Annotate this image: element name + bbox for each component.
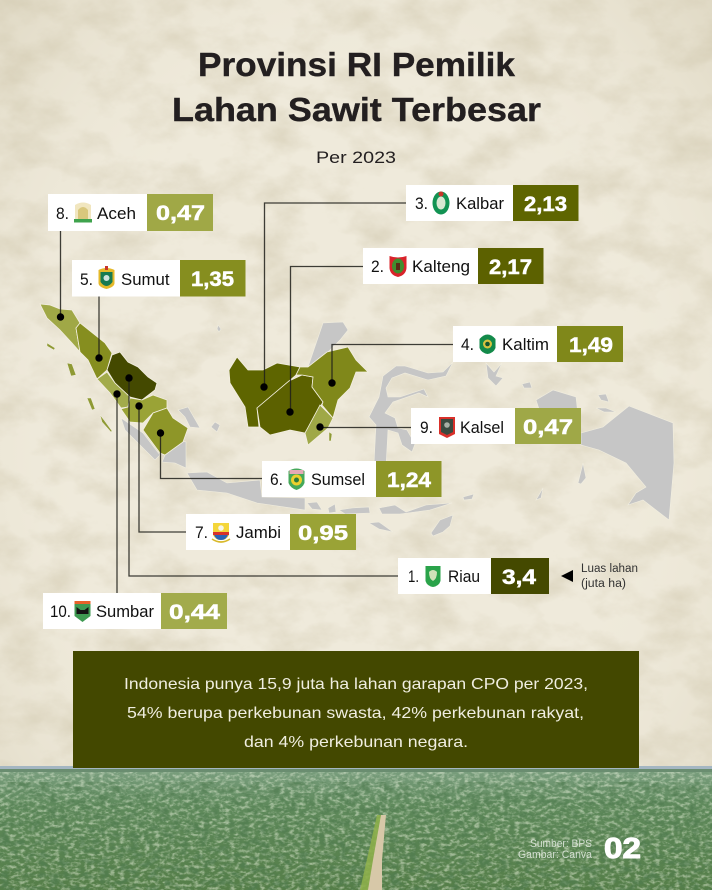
label: Jambi [186, 514, 356, 550]
emblem: Sumsel [288, 468, 304, 490]
legend note [561, 563, 638, 590]
label: Kaltim: 1,49 [569, 334, 613, 357]
label: Kalbar: 3. [415, 194, 428, 213]
label: Aceh: 8. [56, 204, 69, 223]
label: Sumbar [43, 593, 227, 629]
emblem: Jambi [212, 523, 230, 542]
callout box [73, 651, 639, 768]
source credit: Gambar: Canva [518, 849, 593, 861]
connector dots [57, 313, 336, 437]
label: Kalteng: 2. [371, 257, 384, 276]
label: Jambi: 0,95 [298, 522, 348, 545]
label: Sumsel: 1,24 [387, 469, 431, 492]
label: Aceh [48, 194, 213, 231]
label: Sumbar: 10. [50, 602, 71, 621]
label: Sumbar: Sumbar [96, 602, 154, 621]
label: Kalteng: 2,17 [489, 256, 532, 279]
label: Kalteng [363, 248, 544, 284]
emblem: Kalbar [432, 192, 450, 214]
small green islands [47, 343, 332, 441]
label: Kalsel: 9. [420, 418, 433, 437]
label: Sumut: 1,35 [191, 268, 234, 291]
connector lines [60, 203, 453, 593]
label: Riau [398, 558, 549, 594]
title: Lahan Sawit Terbesar [172, 91, 541, 128]
label: Jambi: 7. [195, 523, 208, 542]
gray islands [121, 322, 674, 536]
label: Riau: Riau [448, 567, 480, 586]
label: Kaltim: 4. [461, 335, 474, 354]
legend note: Luas lahan [581, 563, 638, 575]
subtitle: Per 2023 [316, 148, 396, 167]
province: Jambi [121, 395, 167, 423]
grass verge [360, 815, 384, 890]
label: Jambi: Jambi [236, 523, 281, 542]
label: Kalbar: 2,13 [524, 193, 567, 216]
label: Riau: 1. [408, 567, 419, 586]
emblem: Aceh [74, 202, 92, 222]
emblem: Kalteng [390, 256, 406, 277]
province: Kalteng [257, 375, 323, 435]
emblem: Sumut [98, 266, 114, 289]
label: Sumut: Sumut [121, 270, 170, 289]
dirt road [368, 815, 386, 890]
label: Kalbar [406, 185, 578, 221]
emblem: Sumbar [74, 601, 90, 622]
label: Kalsel: Kalsel [460, 418, 504, 437]
province: Sumbar [97, 372, 130, 408]
label: Kalsel [411, 408, 581, 444]
palm plantation photo [0, 766, 712, 890]
label: Sumut [72, 260, 246, 296]
province: Kalbar [229, 357, 300, 427]
callout box: dan 4% perkebunan negara. [244, 734, 468, 751]
label: Riau: 3,4 [502, 566, 536, 589]
title [172, 46, 541, 128]
callout box: 54% berupa perkebunan swasta, 42% perkebunan rakyat, [127, 705, 584, 722]
province: Sumut [76, 323, 112, 379]
icon: legend arrow [561, 570, 573, 582]
label: Kalteng: Kalteng [412, 257, 470, 276]
source credit: Sumber: BPS [530, 838, 592, 850]
map of Indonesia [40, 304, 674, 536]
province: Aceh [40, 304, 80, 352]
emblem: Kaltim [480, 334, 496, 354]
emblem: Riau [426, 566, 440, 587]
label: Sumut: 5. [80, 270, 93, 289]
province: Riau [107, 352, 157, 400]
source credit [518, 838, 593, 861]
callout box: Indonesia punya 15,9 juta ha lahan garapan CPO per 2023, [124, 676, 588, 693]
label: Aceh: Aceh [97, 204, 136, 223]
province: Kaltim [296, 347, 368, 418]
label: Sumsel [262, 461, 442, 497]
legend note: (juta ha) [581, 578, 626, 590]
label: Sumsel: 6. [270, 470, 283, 489]
label: Kaltim: Kaltim [502, 335, 549, 354]
label: Kaltim [453, 326, 623, 362]
label: Sumsel: Sumsel [311, 470, 365, 489]
province: Sumsel [143, 408, 188, 455]
label: Aceh: 0,47 [156, 202, 205, 225]
label: Kalsel: 0,47 [523, 416, 573, 439]
page number: 02 [604, 833, 641, 865]
title: Provinsi RI Pemilik [198, 46, 516, 83]
province: Kalsel [305, 405, 333, 445]
label: Kalbar: Kalbar [456, 194, 504, 213]
label: Sumbar: 0,44 [169, 601, 220, 624]
emblem: Kalsel [439, 417, 455, 438]
